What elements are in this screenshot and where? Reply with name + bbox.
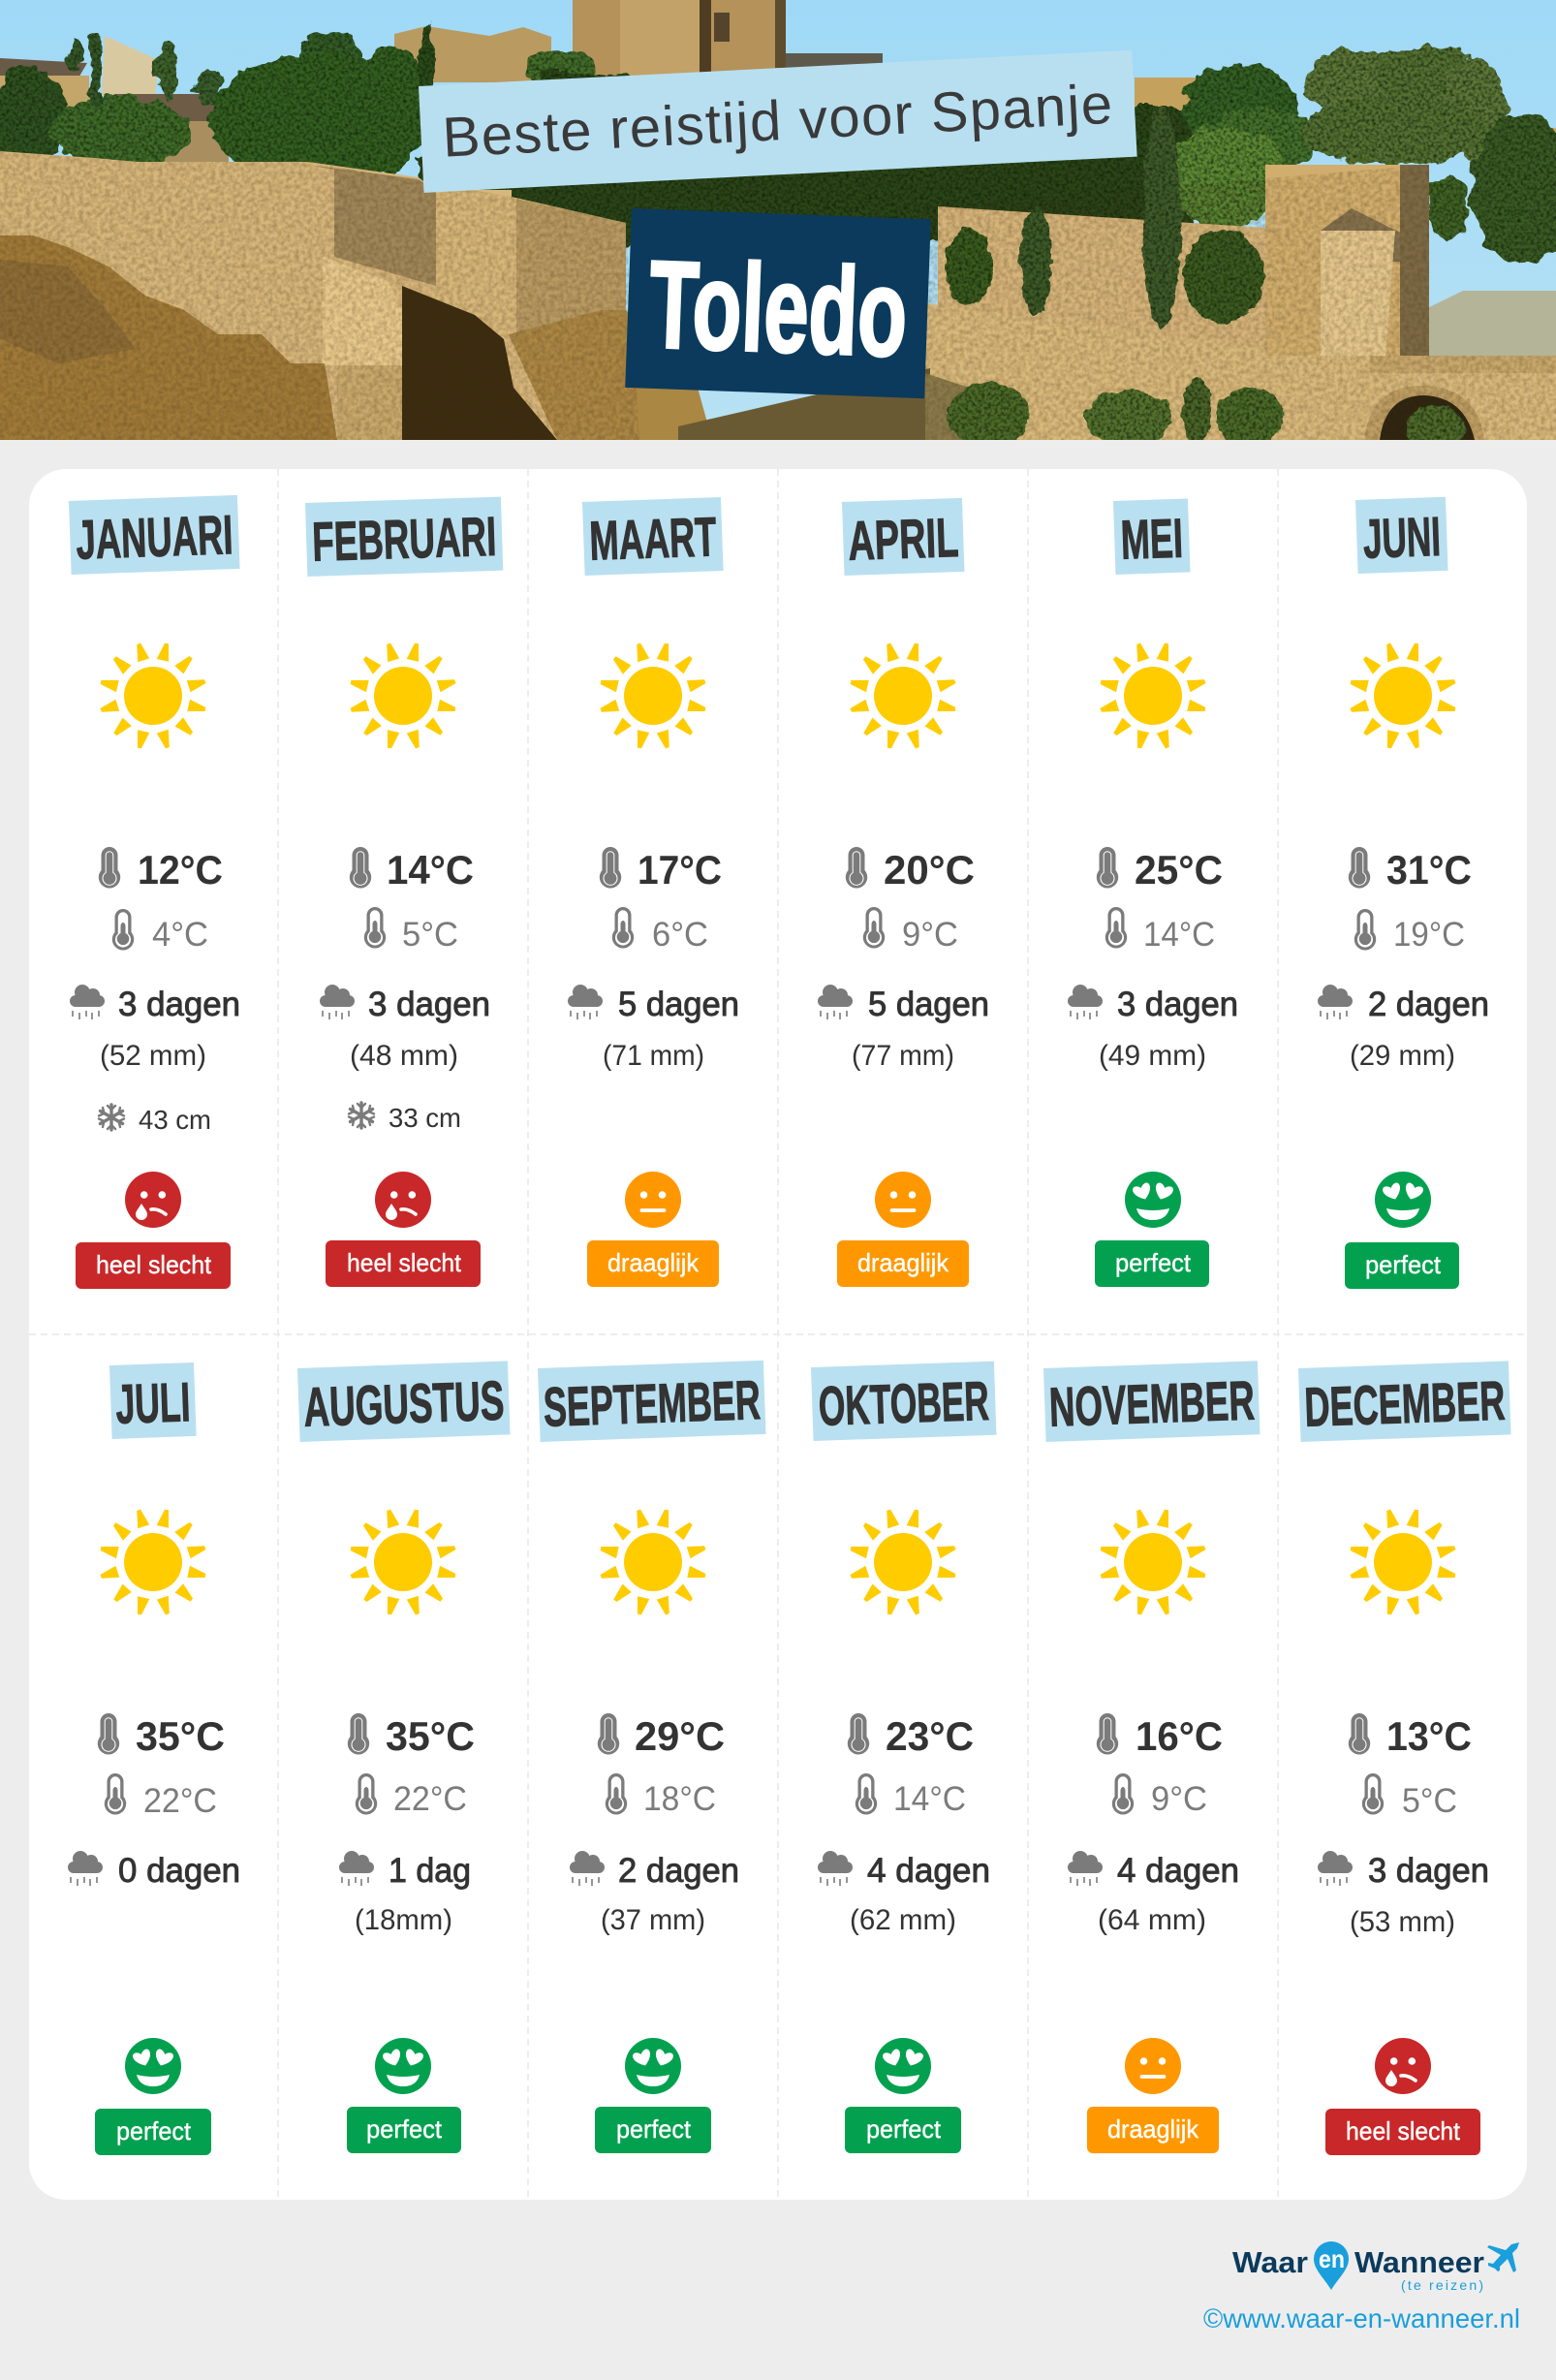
snowfall xyxy=(99,1105,211,1135)
month heading xyxy=(1355,497,1448,574)
icon: map pin xyxy=(1314,2241,1349,2290)
rating label: heel slecht xyxy=(96,1250,212,1279)
title strip xyxy=(419,50,1137,193)
rating label: perfect xyxy=(1365,1250,1442,1279)
rain days: 1 dag xyxy=(389,1852,471,1890)
rain days: 0 dagen xyxy=(118,1852,240,1890)
panel: september xyxy=(538,1361,766,2153)
panel: november xyxy=(1043,1361,1260,2153)
month heading: AUGUSTUS xyxy=(302,1370,505,1439)
month heading xyxy=(811,1362,996,1441)
high temperature xyxy=(1097,1713,1223,1759)
rating label xyxy=(587,1240,719,1287)
icon: sun xyxy=(1350,1509,1456,1615)
icon: airplane xyxy=(1487,2242,1519,2272)
rain days xyxy=(70,985,240,1023)
snowfall xyxy=(349,1103,461,1133)
rain days xyxy=(1068,1851,1239,1890)
high temperature: 31°C xyxy=(1386,847,1472,892)
icon: sun xyxy=(100,1509,206,1615)
rating label xyxy=(1325,2109,1480,2155)
rain days xyxy=(568,985,739,1023)
rating label: perfect xyxy=(366,2114,443,2144)
panel: juni xyxy=(1318,497,1489,1289)
month heading: APRIL xyxy=(847,507,959,573)
back trees xyxy=(0,23,1556,265)
rating label: draaglijk xyxy=(1107,2114,1199,2144)
high temperature: 12°C xyxy=(138,847,223,892)
high temperature xyxy=(1349,1713,1472,1759)
month heading: SEPTEMBER xyxy=(543,1369,762,1439)
high temperature: 14°C xyxy=(387,847,474,892)
header photo: Toledo walls xyxy=(0,0,1556,452)
rain days: 3 dagen xyxy=(1368,1852,1489,1890)
rating face xyxy=(625,1172,681,1228)
rating face xyxy=(1375,2038,1431,2094)
icon: sun xyxy=(1350,642,1456,749)
city title: Toledo xyxy=(647,235,910,383)
low temperature: 6°C xyxy=(652,916,708,954)
rain days: 4 dagen xyxy=(867,1852,990,1890)
front trees xyxy=(945,107,1465,452)
rating label xyxy=(595,2107,711,2153)
high temperature xyxy=(99,847,223,892)
panel: oktober xyxy=(811,1362,996,2153)
rain days: 2 dagen xyxy=(1368,986,1489,1023)
month heading: MAART xyxy=(588,506,718,573)
low temperature: 14°C xyxy=(893,1780,966,1818)
rating label xyxy=(1087,2107,1219,2153)
month heading: NOVEMBER xyxy=(1048,1369,1256,1439)
rating label xyxy=(326,1240,481,1287)
rainfall: (52 mm) xyxy=(100,1040,206,1072)
icon: sun xyxy=(350,1509,456,1615)
month heading xyxy=(1113,498,1190,575)
low temperature: 22°C xyxy=(393,1780,467,1818)
month heading: JUNI xyxy=(1362,506,1442,571)
rating face xyxy=(125,1172,181,1228)
month heading xyxy=(297,1361,511,1442)
high temperature xyxy=(848,1713,974,1759)
rain days: 5 dagen xyxy=(618,986,739,1023)
rain days: 4 dagen xyxy=(1117,1852,1239,1890)
rainfall: (71 mm) xyxy=(603,1040,704,1072)
rating label: heel slecht xyxy=(347,1248,462,1277)
rating label xyxy=(1095,1240,1209,1287)
rating label xyxy=(76,1242,231,1289)
rating label: perfect xyxy=(866,2114,942,2144)
icon: sun xyxy=(600,1509,706,1615)
snowfall: 33 cm xyxy=(389,1103,461,1133)
rating label: heel slecht xyxy=(1346,2116,1461,2145)
rating label xyxy=(845,2107,961,2153)
high temperature: 13°C xyxy=(1386,1713,1472,1759)
month heading: MEI xyxy=(1120,508,1184,572)
high temperature: 17°C xyxy=(638,847,722,892)
icon: sun xyxy=(850,1509,956,1615)
icon: sun xyxy=(1100,642,1206,749)
rain days xyxy=(1068,985,1238,1023)
panel: januari xyxy=(69,495,240,1289)
rainfall: (48 mm) xyxy=(350,1040,458,1072)
month heading xyxy=(538,1361,766,1442)
high temperature: 16°C xyxy=(1136,1713,1223,1759)
rain days: 5 dagen xyxy=(868,986,989,1023)
rainfall: (37 mm) xyxy=(601,1904,705,1936)
rainfall: (64 mm) xyxy=(1098,1904,1206,1936)
low temperature: 22°C xyxy=(143,1782,217,1820)
rain days xyxy=(339,1851,471,1890)
rainfall: (29 mm) xyxy=(1350,1040,1455,1072)
logo: Waar en Wanneer: Wanneer xyxy=(1354,2245,1484,2279)
rating label xyxy=(1345,1242,1459,1289)
logo: Waar en Wanneer: Waar xyxy=(1232,2245,1308,2279)
rainfall: (53 mm) xyxy=(1350,1906,1455,1938)
rating label: draaglijk xyxy=(607,1248,700,1277)
rating label xyxy=(837,1240,969,1287)
month heading xyxy=(69,495,240,575)
rating label: draaglijk xyxy=(857,1248,949,1277)
rating label: perfect xyxy=(1115,1248,1192,1277)
low temperature xyxy=(1354,909,1465,954)
rating label: perfect xyxy=(616,2114,692,2144)
rating face xyxy=(1375,1172,1431,1228)
month heading xyxy=(842,498,964,576)
logo: Waar en Wanneer xyxy=(1232,2241,1519,2293)
panel: juli xyxy=(68,1362,240,2155)
high temperature xyxy=(1349,847,1472,892)
rating face xyxy=(375,2038,431,2094)
panel: augustus xyxy=(297,1361,511,2153)
high temperature xyxy=(350,847,474,892)
rating label xyxy=(95,2109,211,2155)
rating label xyxy=(347,2107,461,2153)
low temperature: 5°C xyxy=(1402,1782,1457,1820)
rain days xyxy=(320,985,490,1023)
icon: sun xyxy=(100,642,206,749)
copyright url: ©www.waar-en-wanneer.nl xyxy=(1203,2303,1520,2333)
low temperature xyxy=(112,909,208,954)
rainfall: (18mm) xyxy=(355,1904,452,1936)
month heading xyxy=(582,497,724,576)
panel: februari xyxy=(305,497,503,1287)
rating face xyxy=(125,2038,181,2094)
panel: december xyxy=(1298,1361,1511,2155)
low temperature xyxy=(364,907,458,954)
low temperature: 18°C xyxy=(643,1780,716,1818)
high temperature: 23°C xyxy=(886,1713,974,1759)
high temperature: 20°C xyxy=(884,847,975,892)
month heading: FEBRUARI xyxy=(311,506,497,574)
panel: april xyxy=(818,498,989,1287)
low temperature xyxy=(606,1773,716,1818)
rain days xyxy=(570,1851,739,1890)
low temperature: 9°C xyxy=(902,916,958,954)
low temperature xyxy=(856,1773,966,1818)
low temperature xyxy=(105,1773,217,1820)
low temperature: 4°C xyxy=(152,916,208,954)
low temperature: 5°C xyxy=(402,916,458,954)
rainfall: (49 mm) xyxy=(1099,1040,1206,1072)
icon: sun xyxy=(350,642,456,749)
low temperature xyxy=(863,907,958,954)
low temperature xyxy=(1362,1773,1457,1820)
month heading xyxy=(305,497,503,577)
panel: mei xyxy=(1068,498,1238,1287)
high temperature xyxy=(348,1713,475,1759)
month heading xyxy=(109,1362,197,1439)
low temperature: 19°C xyxy=(1393,916,1465,954)
rating face xyxy=(875,1172,931,1228)
city title xyxy=(625,208,931,398)
month heading xyxy=(1043,1361,1260,1442)
rainfall: (62 mm) xyxy=(850,1904,956,1936)
rain days xyxy=(1318,985,1489,1023)
rating label: perfect xyxy=(116,2116,192,2145)
rain days: 3 dagen xyxy=(368,986,490,1023)
icon: sun xyxy=(600,642,706,749)
high temperature: 25°C xyxy=(1135,847,1223,892)
rating face xyxy=(625,2038,681,2094)
icon: sun xyxy=(850,642,956,749)
snowfall: 43 cm xyxy=(139,1105,211,1135)
high temperature: 35°C xyxy=(386,1713,475,1759)
rain days xyxy=(818,985,989,1023)
rating face xyxy=(1125,2038,1181,2094)
month heading: OKTOBER xyxy=(818,1370,990,1438)
rating face xyxy=(375,1172,431,1228)
low temperature: 9°C xyxy=(1151,1780,1207,1818)
low temperature xyxy=(612,907,708,954)
month heading: JANUARI xyxy=(75,504,233,572)
rainfall: (77 mm) xyxy=(852,1040,954,1072)
rain days: 2 dagen xyxy=(618,1852,739,1890)
rating face xyxy=(1125,1172,1181,1228)
low temperature xyxy=(1112,1773,1207,1818)
logo: Waar en Wanneer: (te reizen) xyxy=(1401,2277,1483,2293)
title strip: Beste reistijd voor Spanje xyxy=(441,73,1113,170)
panel: climate table card xyxy=(29,469,1527,2200)
rain days xyxy=(68,1851,240,1890)
icon: sun xyxy=(1100,1509,1206,1615)
low temperature: 14°C xyxy=(1143,916,1215,954)
rain days xyxy=(1318,1851,1489,1890)
low temperature xyxy=(356,1773,467,1818)
month heading: JULI xyxy=(114,1371,191,1436)
rain days: 3 dagen xyxy=(118,986,240,1023)
rain days xyxy=(818,1851,990,1890)
rain days: 3 dagen xyxy=(1117,986,1238,1023)
high temperature xyxy=(600,847,722,892)
high temperature: 29°C xyxy=(635,1713,725,1759)
rating face xyxy=(875,2038,931,2094)
low temperature xyxy=(1105,907,1215,954)
high temperature: 35°C xyxy=(136,1713,225,1759)
panel: maart xyxy=(568,497,739,1287)
logo: Waar en Wanneer: en xyxy=(1319,2244,1345,2273)
high temperature xyxy=(1097,847,1223,892)
high temperature xyxy=(98,1713,225,1759)
